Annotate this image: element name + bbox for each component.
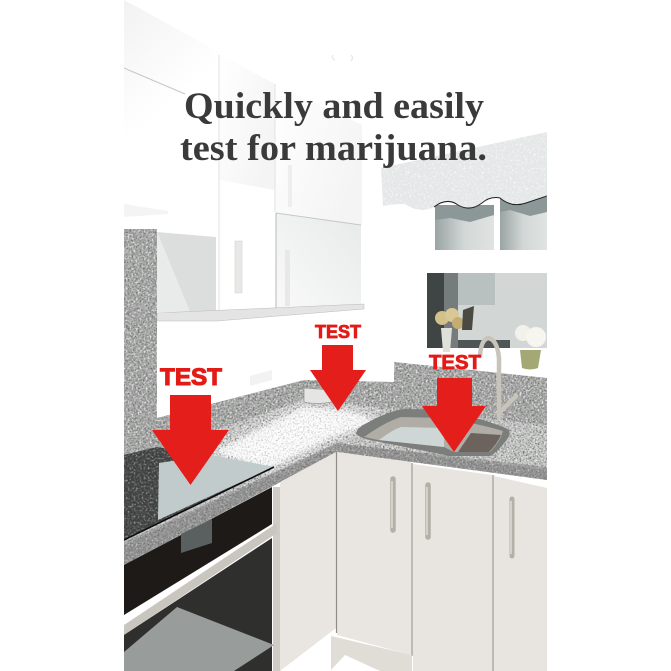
window <box>381 132 547 348</box>
cabinet handles <box>235 241 242 293</box>
socket and canister on wall <box>250 370 272 386</box>
flower vases <box>435 306 546 370</box>
tap <box>480 338 516 418</box>
ceiling light <box>332 55 352 61</box>
lower right wall cabinet door <box>276 213 361 309</box>
hob <box>124 447 274 540</box>
oven <box>124 487 280 671</box>
title <box>180 86 487 169</box>
arrow 3 with label: TEST <box>429 352 481 374</box>
window valance blind <box>381 132 547 210</box>
arrow 1 with label: TEST <box>160 364 222 391</box>
plinth <box>331 636 412 671</box>
infographic canvas <box>124 0 547 671</box>
under cabinet shade <box>157 232 216 312</box>
upper window panes <box>435 215 494 250</box>
lower window panes <box>458 273 547 348</box>
granite backsplash and counter <box>124 229 547 569</box>
rail under cabinet <box>124 204 168 217</box>
upper wall cabinets <box>124 0 364 321</box>
door shadow lines <box>336 452 493 671</box>
title: Quickly and easily <box>184 86 485 127</box>
counter front edge <box>124 443 547 565</box>
under cabinet shelf <box>157 304 364 321</box>
light counter surface <box>124 400 547 545</box>
arrow 3 with label <box>422 352 486 452</box>
arrow 2 with label: TEST <box>315 322 361 342</box>
arrow 2 with label <box>310 322 366 411</box>
title: test for marijuana. <box>180 128 487 169</box>
kitchen photo <box>124 0 547 671</box>
arrow 1 with label <box>152 364 229 485</box>
base cabinet handles <box>392 479 512 556</box>
base cabinets <box>280 452 547 671</box>
sink <box>356 409 510 456</box>
